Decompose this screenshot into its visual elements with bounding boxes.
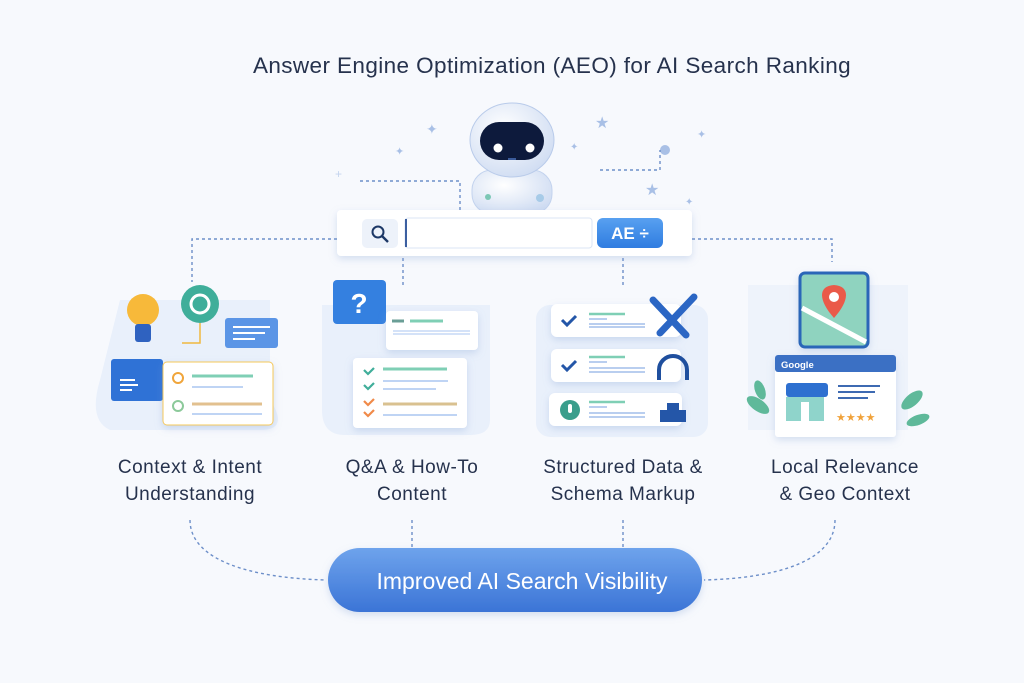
connectors [190,150,835,580]
list card [163,362,273,425]
label: local: & Geo Context [779,484,911,505]
AE button: AE ÷ [611,224,649,243]
bottom pill [328,548,702,612]
label: local: Local Relevance [771,457,919,478]
decorative sparkles: ✦ [426,121,438,137]
icon: lightbulb [127,294,159,342]
labels [118,457,919,505]
decorative sparkles: ✦ [685,197,693,208]
panel: Q&A [322,280,490,435]
label: qa: Content [377,484,447,505]
google card [775,355,896,437]
decorative sparkles: ✦ [697,129,706,141]
decorative sparkles: + [335,167,342,181]
decorative sparkles: ★ [645,182,659,199]
bottom pill: Improved AI Search Visibility [376,568,668,594]
label: structured: Structured Data & [543,457,703,478]
google card: Google [781,360,814,371]
icon: dome [659,356,687,380]
label: structured: Schema Markup [551,484,695,505]
search bar [337,210,692,256]
panel: context & intent [96,285,278,430]
panel: local [744,273,931,437]
icon: map [800,273,868,347]
icon: building [660,403,686,422]
google card: ★★★★ [836,412,876,424]
blue card [111,359,163,401]
icon: question bubble [333,280,386,324]
panel: structured data [536,297,708,437]
chat bubble [225,318,278,348]
robot [470,103,554,214]
icon: question bubble: ? [350,288,368,319]
label: qa: Q&A & How-To [346,457,478,478]
icon: search [362,219,398,248]
label: context: Context & Intent [118,457,262,478]
decorative sparkles: ✦ [570,142,578,153]
AE button [597,218,663,248]
title: Answer Engine Optimization (AEO) for AI Search Ranking [253,53,851,78]
decorative sparkles [335,115,706,208]
decorative sparkles: ★ [595,115,609,132]
leaves [744,379,931,429]
label: context: Understanding [125,484,255,505]
decorative sparkles: ✦ [395,146,404,158]
icon: wrench & screwdriver [653,297,694,335]
icon: green clock [181,285,219,343]
